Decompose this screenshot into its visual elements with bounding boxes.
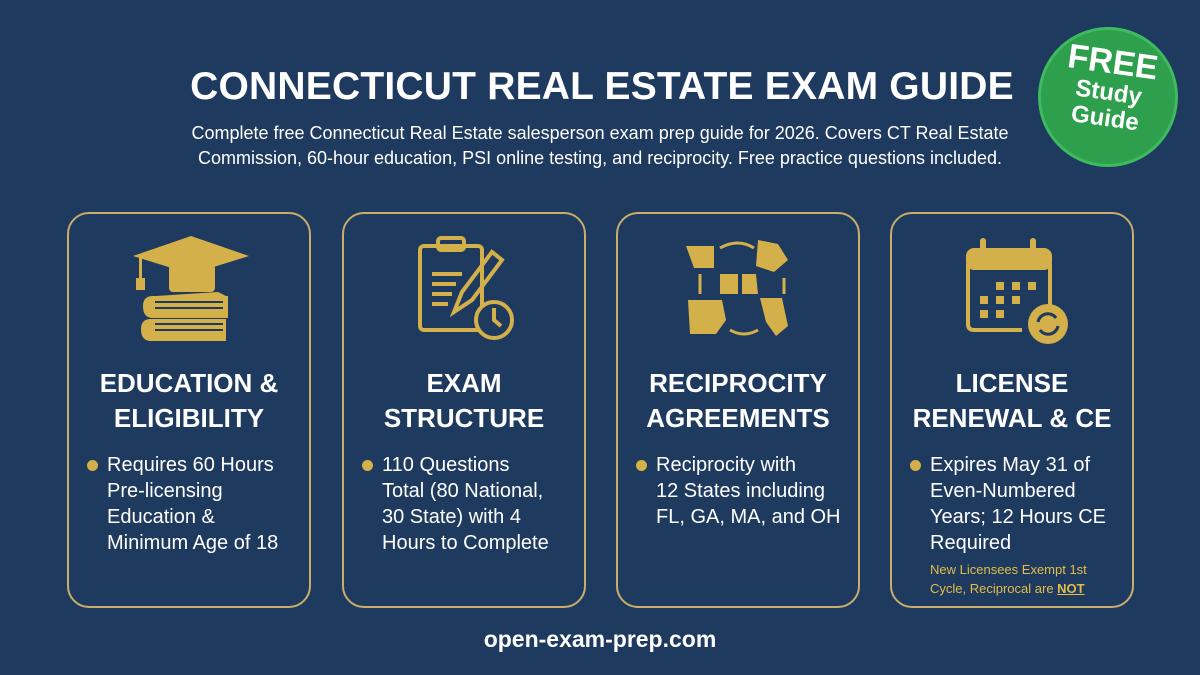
panel: reciprocity (616, 212, 860, 608)
heading: EDUCATION & (100, 368, 278, 398)
note: Cycle, Reciprocal are NOT (930, 581, 1085, 596)
bullet: Required (930, 532, 1011, 554)
subtitle: Complete free Connecticut Real Estate salesperson exam prep guide for 2026. Covers CT Real Estate (191, 123, 1009, 143)
heading: ELIGIBILITY (114, 403, 264, 433)
badge: free study guide: Study (1074, 75, 1144, 111)
panel: license renewal (890, 212, 1134, 608)
bullet: Even-Numbered (930, 480, 1076, 502)
heading: LICENSE (956, 368, 1068, 398)
panel: exam structure (342, 212, 586, 608)
bullet (87, 452, 305, 556)
badge: free study guide: Guide (1069, 100, 1141, 136)
bullet: Total (80 National, (382, 480, 543, 502)
bullet: 30 State) with 4 (382, 506, 521, 528)
bullet (362, 452, 580, 556)
bullet: Years; 12 Hours CE (930, 506, 1106, 528)
heading: STRUCTURE (384, 403, 544, 433)
icon: clipboard with pencil and clock (418, 236, 514, 340)
heading (913, 368, 1111, 433)
subtitle: Commission, 60-hour education, PSI online testing, and reciprocity. Free practice questions included. (198, 148, 1002, 168)
badge: free study guide: FREE (1065, 37, 1160, 87)
heading (646, 368, 830, 433)
heading (384, 368, 544, 433)
icon: graduation cap on books (133, 236, 249, 341)
note: New Licensees Exempt 1st (930, 562, 1087, 577)
heading: AGREEMENTS (646, 403, 830, 433)
subtitle (191, 123, 1009, 168)
icon: states map with arrows (686, 240, 788, 336)
bullet: Education & (107, 506, 215, 528)
heading (100, 368, 278, 433)
panel: education (67, 212, 311, 608)
bullet: Expires May 31 of (930, 454, 1090, 476)
heading: RENEWAL & CE (913, 403, 1111, 433)
bullet: 110 Questions (382, 454, 510, 476)
bullet: Reciprocity with (656, 454, 796, 476)
bullet (910, 452, 1128, 556)
heading: RECIPROCITY (649, 368, 827, 398)
footer: open-exam-prep.com (484, 626, 716, 652)
bullet: Minimum Age of 18 (107, 532, 278, 554)
note (930, 562, 1087, 596)
bullet: Pre-licensing (107, 480, 223, 502)
bullet: Hours to Complete (382, 532, 549, 554)
heading: EXAM (426, 368, 502, 398)
bullet: FL, GA, MA, and OH (656, 506, 841, 528)
badge: free study guide (1029, 18, 1187, 176)
icon: calendar with refresh (966, 238, 1068, 344)
title: CONNECTICUT REAL ESTATE EXAM GUIDE (190, 65, 1014, 108)
bullet (636, 452, 854, 530)
bullet: Requires 60 Hours (107, 454, 274, 476)
bullet: 12 States including (656, 480, 825, 502)
